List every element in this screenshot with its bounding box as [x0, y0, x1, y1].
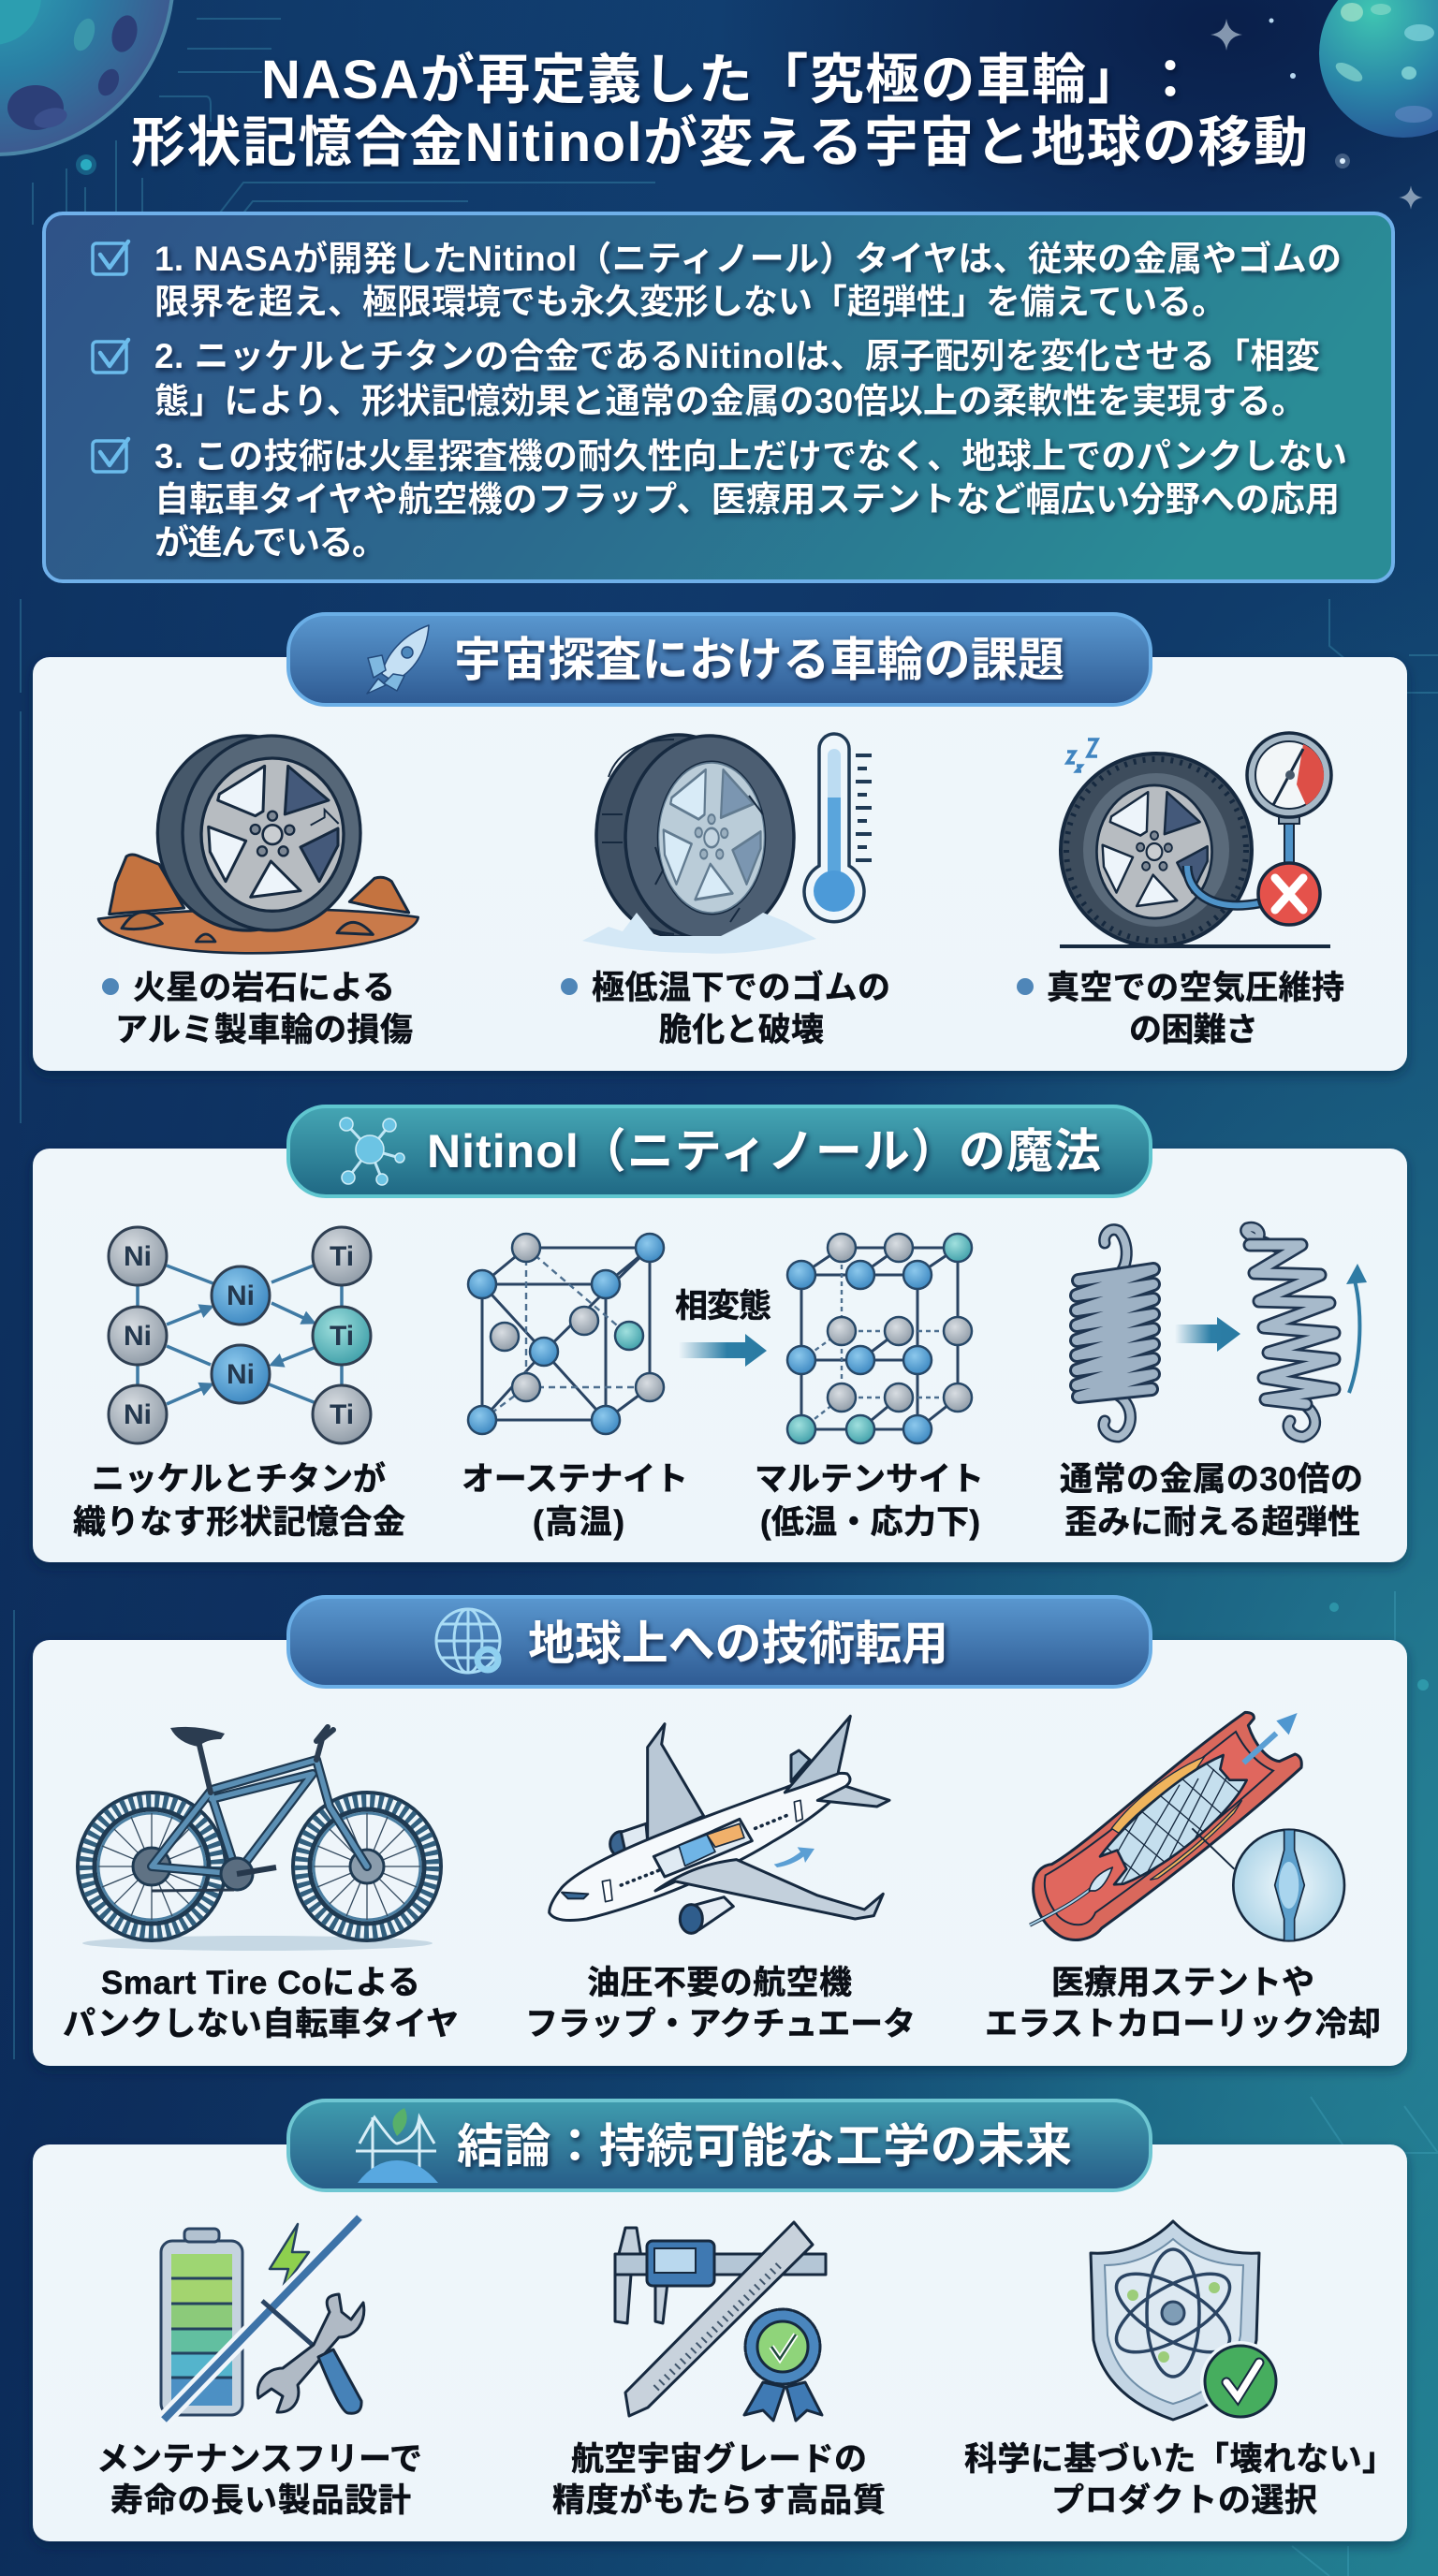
label: Mars rock damage: 火星の岩石による: [133, 970, 395, 1006]
label: bike tire: Smart Tire Coによる: [101, 1965, 420, 2001]
diagram: austenite crystal: [468, 1234, 664, 1434]
illustration: stent in artery: [1030, 1712, 1344, 1940]
label: medical stent: エラストカローリック冷却: [985, 2006, 1381, 2042]
diagram: martensite crystal: [787, 1234, 972, 1443]
panel: summary: [44, 213, 1393, 581]
label: unbreakable product: プロダクトの選択: [1051, 2481, 1317, 2519]
icon: molecule: [340, 1118, 404, 1185]
label: medical stent: [985, 1965, 1381, 2042]
diagram: Ni-Ti atoms: Ti: [330, 1321, 354, 1352]
label: aerospace grade: 航空宇宙グレードの: [571, 2441, 867, 2478]
label: maintenance free: 寿命の長い製品設計: [110, 2482, 411, 2519]
label: martensite: [755, 1461, 984, 1541]
label: unbreakable product: [964, 2441, 1395, 2519]
arrow: spring stretch: [1175, 1317, 1240, 1352]
label: alloy: [73, 1461, 405, 1541]
label: Mars rock damage: [102, 970, 413, 1048]
icon: bridge with leaf: [356, 2108, 438, 2183]
icon: checkbox 2: [93, 340, 128, 373]
panel: Nitinol magic: [33, 1106, 1407, 1562]
label: maintenance free: [96, 2441, 422, 2519]
heading: conclusion: 結論：持続可能な工学の未来: [457, 2120, 1072, 2173]
label: austenite: (高温): [533, 1504, 624, 1541]
heading: technology transfer: 地球上への技術転用: [528, 1617, 948, 1670]
heading: Nitinol magic: Nitinol（ニティノール）の魔法: [427, 1125, 1101, 1178]
illustration: pressure gauge and tire in vacuum: [1060, 733, 1331, 946]
text: point 3: [154, 437, 1347, 562]
heading: technology transfer: [288, 1597, 1151, 1687]
text: point 3: 3. この技術は火星探査機の耐久性向上だけでなく、地球上でのパンクしない: [154, 437, 1347, 476]
label: bike tire: パンクしない自転車タイヤ: [63, 2006, 459, 2042]
heading: challenges: 宇宙探査における車輪の課題: [454, 634, 1064, 686]
label: superelasticity: 歪みに耐える超弾性: [1064, 1504, 1360, 1541]
illustration: caliper, ruler and badge: [615, 2222, 826, 2421]
label: flap actuator: [525, 1965, 916, 2042]
label: superelasticity: 通常の金属の30倍の: [1060, 1461, 1363, 1498]
label: air pressure: 真空での空気圧維持: [1047, 970, 1344, 1006]
diagram: Ni-Ti atoms: Ti: [330, 1241, 354, 1272]
heading: conclusion: [288, 2100, 1151, 2190]
icon: checkbox 1: [93, 242, 128, 274]
diagram: Ni-Ti atoms: [109, 1227, 371, 1443]
illustration: bicycle: [78, 1727, 441, 1951]
label: unbreakable product: 科学に基づいた「壊れない」: [964, 2441, 1395, 2478]
label: austenite: [462, 1461, 688, 1541]
label: flap actuator: 油圧不要の航空機: [587, 1965, 852, 2001]
label: alloy: 織りなす形状記憶合金: [73, 1504, 405, 1541]
label: superelasticity: [1060, 1461, 1363, 1541]
stars: [1211, 19, 1423, 210]
label and arrow: phase transformation: 相変態: [675, 1288, 771, 1325]
label: medical stent: 医療用ステントや: [1051, 1965, 1314, 2001]
label: maintenance free: メンテナンスフリーで: [96, 2441, 422, 2478]
text: point 2: 2. ニッケルとチタンの合金であるNitinolは、原子配列を変化させる「相変: [154, 337, 1320, 375]
planet: top right: [1319, 0, 1438, 138]
title: 形状記憶合金Nitinolが変える宇宙と地球の移動: [131, 112, 1308, 173]
icon: rocket: [367, 625, 429, 694]
diagram: Ni-Ti atoms: Ti: [330, 1399, 354, 1430]
text: point 2: 態」により、形状記憶効果と通常の金属の30倍以上の柔軟性を実現する。: [154, 382, 1306, 420]
illustration: damaged wheel on Mars rock: [98, 736, 418, 953]
illustration: airplane: [550, 1716, 889, 1933]
illustration: frozen cracked tire: [582, 734, 872, 954]
label: alloy: ニッケルとチタンが: [92, 1461, 386, 1498]
label: rubber embrittlement: 極低温下でのゴムの: [592, 969, 890, 1006]
panel: technology transfer: [33, 1597, 1407, 2066]
label: flap actuator: フラップ・アクチュエータ: [525, 2006, 916, 2042]
text: point 1: [154, 239, 1342, 321]
text: point 1: 1. NASAが開発したNitinol（ニティノール）タイヤは、従来の金属やゴムの: [154, 239, 1342, 278]
panel: conclusion: [33, 2100, 1407, 2541]
title: [131, 50, 1308, 173]
label: aerospace grade: 精度がもたらす高品質: [552, 2482, 886, 2519]
label: rubber embrittlement: [561, 969, 890, 1048]
diagram: stretched spring: [1246, 1227, 1334, 1437]
label: rubber embrittlement: 脆化と破壊: [659, 1012, 824, 1048]
icon: globe and gear: [436, 1609, 500, 1673]
panel: challenges: [33, 614, 1407, 1071]
diagram: Ni-Ti atoms: Ni: [227, 1281, 255, 1311]
label: air pressure: [1017, 970, 1344, 1048]
illustration: battery and tools: [161, 2217, 364, 2420]
heading: challenges: [288, 614, 1151, 705]
icon: sleep marks: [1067, 739, 1097, 771]
label: martensite: (低温・応力下): [760, 1504, 980, 1541]
icon: thermometer: [804, 734, 872, 922]
text: point 3: 自転車タイヤや航空機のフラップ、医療用ステントなど幅広い分野への応用: [154, 480, 1340, 519]
arrow: curved stretch: [1346, 1264, 1367, 1393]
text: point 1: 限界を超え、極限環境でも永久変形しない「超弾性」を備えている。: [154, 283, 1226, 321]
text: point 2: [154, 337, 1320, 420]
title: NASAが再定義した「究極の車輪」：: [261, 50, 1197, 110]
label: austenite: オーステナイト: [462, 1461, 688, 1498]
label: martensite: マルテンサイト: [755, 1461, 984, 1498]
planet: top left: [0, 0, 173, 154]
diagram: Ni-Ti atoms: Ni: [124, 1399, 152, 1430]
diagram: Ni-Ti atoms: Ni: [227, 1359, 255, 1390]
icon: checkbox 3: [93, 439, 128, 472]
label: air pressure: の困難さ: [1129, 1012, 1258, 1048]
diagram: Ni-Ti atoms: Ni: [124, 1241, 152, 1272]
diagram: Ni-Ti atoms: Ni: [124, 1321, 152, 1352]
illustration: shield with atom: [1091, 2221, 1281, 2422]
label: bike tire: [63, 1965, 459, 2042]
label and arrow: phase transformation: [675, 1288, 771, 1367]
text: point 3: が進んでいる。: [154, 523, 387, 562]
label: aerospace grade: [552, 2441, 886, 2519]
diagram: compressed spring: [1077, 1230, 1153, 1437]
label: Mars rock damage: アルミ製車輪の損傷: [115, 1012, 413, 1048]
heading: Nitinol magic: [288, 1106, 1151, 1196]
